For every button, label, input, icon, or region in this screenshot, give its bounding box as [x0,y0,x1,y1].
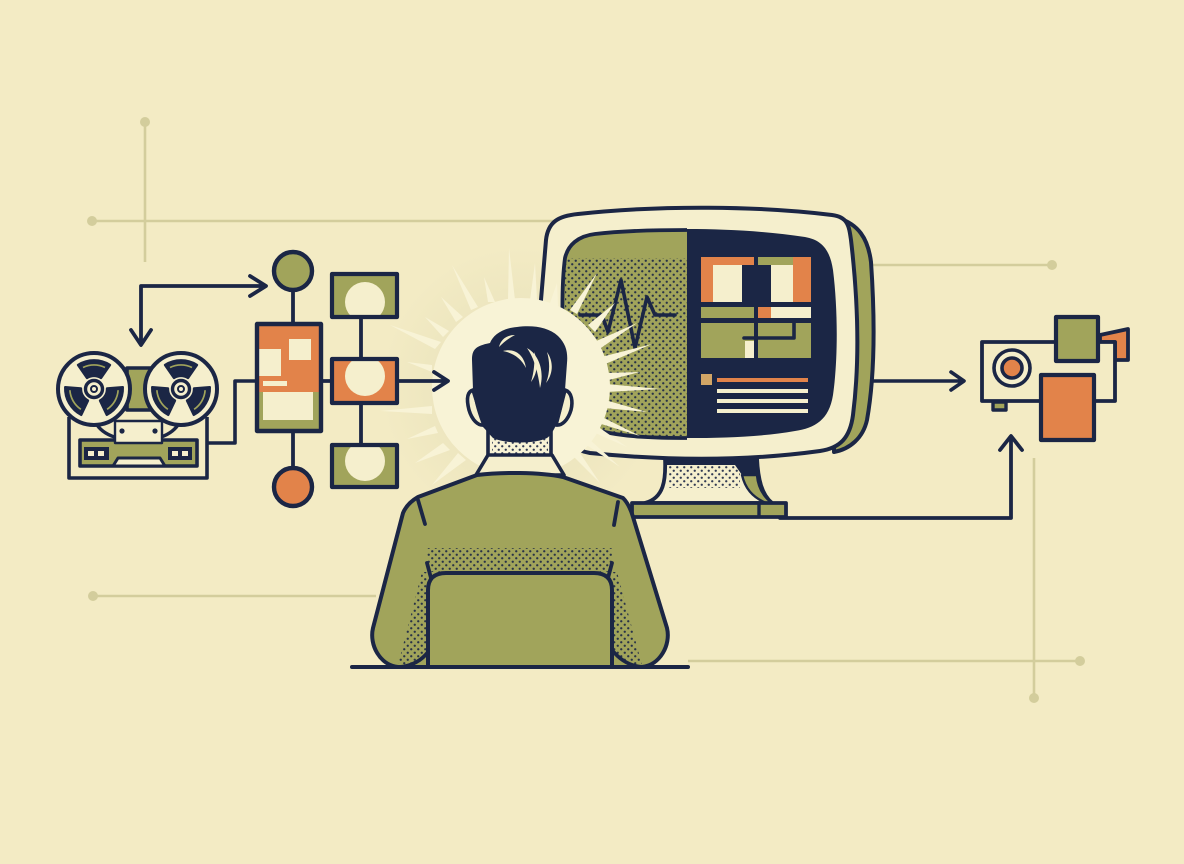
faint guide lines [87,117,1085,703]
halo circle [432,298,610,476]
jacket shading [398,548,642,665]
projector rear tab [1100,329,1128,360]
projector [982,317,1128,440]
connector: stand to projector arrow [780,436,1022,518]
projector orange panel [1041,375,1094,440]
right reel [145,353,217,425]
screen: waveform [580,280,675,348]
neck [488,425,551,455]
person seen from behind [372,326,668,667]
screen: outline [562,230,687,438]
arrow: flowchart to person [398,372,448,390]
recorder centre panel [127,368,151,410]
tape recorder [58,353,217,478]
projector olive panel [1056,317,1098,361]
illustration canvas [56,117,1130,703]
projector body [982,342,1115,401]
node: olive circle [274,252,312,290]
node: top option [332,274,397,322]
tape arc [97,425,178,438]
chair back [428,573,612,667]
monitor side casing [834,218,874,452]
head and hair [472,326,567,442]
node: bottom option [332,441,397,487]
flowchart [257,252,397,506]
recorder body [69,417,207,478]
jacket [372,473,668,667]
node: middle option [332,356,397,403]
monitor stand [632,456,786,517]
arrow: loop from flowchart to recorder [131,276,266,345]
left reel [58,353,130,425]
hair highlights [499,335,552,388]
collar [476,455,564,475]
monitor screen [562,229,837,438]
screen: halftone [565,258,687,436]
screen: navy half [687,229,837,438]
recorder head block [115,421,162,443]
node: orange circle [274,468,312,506]
seams and folds [400,500,642,667]
screen: layout blocks [701,257,811,358]
halo rays [380,248,660,485]
flowchart connectors [293,290,361,468]
monitor [541,208,874,517]
halo glow [381,247,661,527]
desk line [352,665,688,669]
ears [468,390,572,425]
screen: olive half [563,231,687,437]
projector lens [994,350,1030,386]
node: main block [257,324,321,431]
screen: text lines [701,374,808,413]
recorder controls [80,440,197,466]
arrow: monitor to projector [873,372,964,390]
projector foot [993,402,1006,410]
monitor bezel [541,208,857,459]
connector: recorder to flowchart [207,381,256,443]
